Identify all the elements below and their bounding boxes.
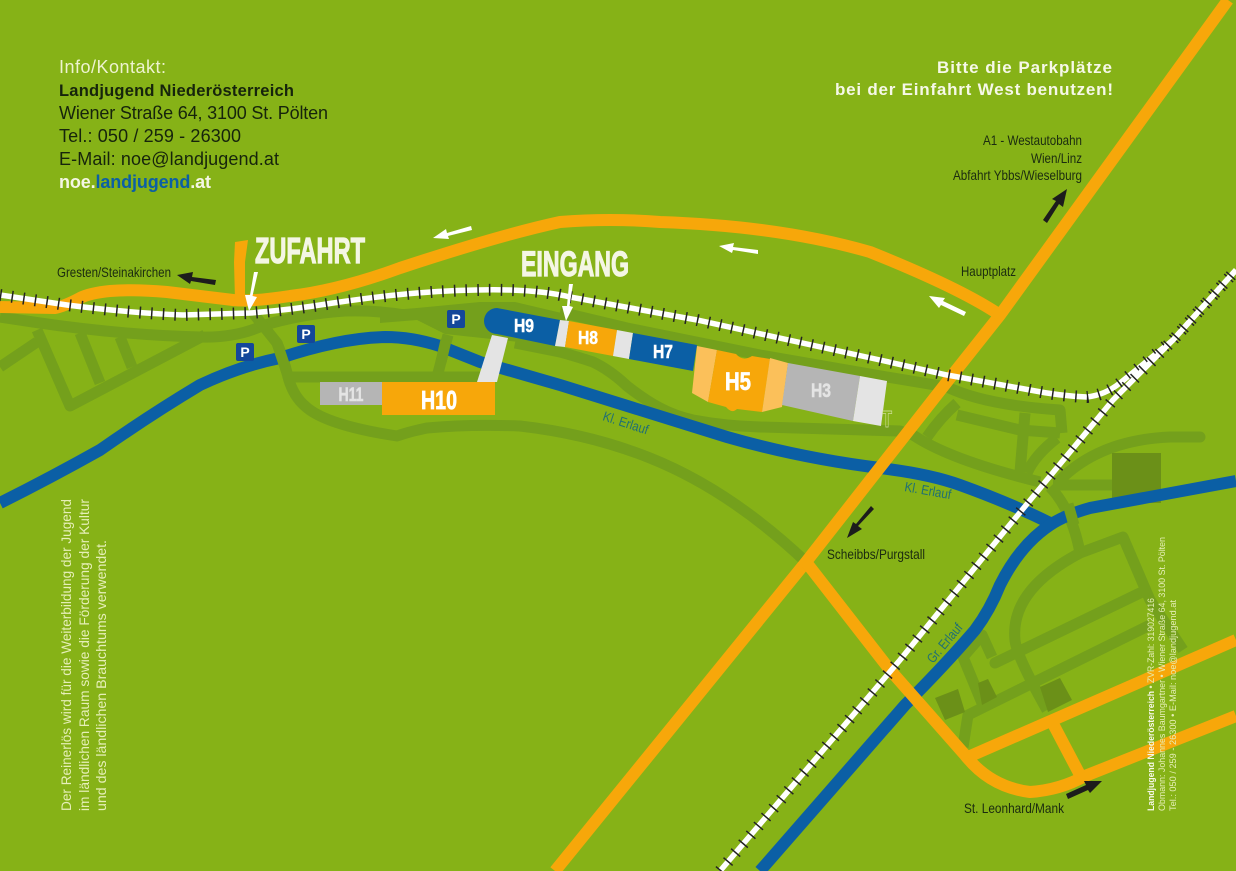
river: Kleine Erlauf [0, 337, 1050, 523]
hall H5: H5 [725, 368, 751, 396]
hall H9 [484, 308, 560, 346]
hall H5 [692, 346, 788, 412]
hall H7 [629, 333, 697, 371]
hall H3 [782, 363, 887, 426]
arrow: black to A1 [1043, 189, 1067, 223]
label: Gresten: Gresten/Steinakirchen [57, 264, 171, 280]
parking notice: bei der Einfahrt West benutzen! [835, 80, 1113, 99]
road crossings over rivers [277, 340, 1074, 525]
river label: Gr. Erlauf: Gr. Erlauf [924, 620, 966, 666]
arrow: to Eingang [562, 284, 573, 321]
arrow: white traffic direction 1 [433, 226, 472, 239]
label: Scheibbs: Scheibbs/Purgstall [827, 546, 925, 562]
road stub to Zufahrt [234, 240, 248, 300]
railway line west-east [0, 270, 1236, 397]
hall H11 [320, 382, 382, 406]
label: St. Leonhard: St. Leonhard/Mank [964, 800, 1065, 816]
vertical note: proceeds: und des ländlichen Brauchtums verwendet. [93, 540, 109, 811]
arrow: to Zufahrt [245, 272, 258, 311]
contact block: noe.landjugend.at [59, 172, 211, 192]
vertical note: proceeds: im ländlichen Raum sowie die Förderung der Kultur [76, 499, 92, 811]
parking sign 3 [447, 310, 465, 328]
arrow: black to Scheibbs [847, 506, 874, 538]
hall H8: H8 [578, 328, 598, 348]
heading: Eingang: EINGANG [521, 245, 629, 284]
arrow: white traffic direction 3 [929, 296, 966, 316]
contact block: Tel.: 050 / 259 - 26300 [59, 126, 241, 146]
contact block: Landjugend Niederösterreich [59, 82, 294, 100]
connector between H9 and H8 [555, 320, 569, 347]
label: A1 Westautobahn: Abfahrt Ybbs/Wieselburg [953, 167, 1082, 183]
arrow: black to Gresten [177, 272, 216, 285]
parking sign 1 [236, 343, 254, 361]
hall H9: H9 [514, 316, 534, 336]
contact block: E-Mail: noe@landjugend.at [59, 149, 279, 169]
small building T marker: T [882, 406, 892, 432]
local roads network [0, 311, 1200, 747]
parking sign 2 [297, 325, 315, 343]
hall H10 [382, 335, 508, 415]
river label: Kl. Erlauf 1: Kl. Erlauf [601, 409, 651, 437]
arrow: white traffic direction 2 [719, 243, 758, 254]
vertical imprint: Tel.: 050 / 259 - 26300 • E-Mail: noe@landjugend.at [1168, 600, 1179, 811]
vertical imprint [1146, 537, 1179, 811]
vertical imprint: Obmann: Johannes Baumgartner • Wiener Straße 64, 3100 St. Pölten [1157, 537, 1168, 811]
hall H7: H7 [653, 342, 673, 362]
hall H3: H3 [811, 381, 831, 402]
river label: Kl. Erlauf 2: Kl. Erlauf [903, 479, 953, 502]
connector between H8 and H7 [613, 330, 633, 359]
hall H10: H10 [421, 385, 457, 415]
heading: Zufahrt: ZUFAHRT [255, 230, 365, 271]
contact block [59, 57, 328, 192]
label: A1 Westautobahn: Wien/Linz [1031, 150, 1082, 166]
river: Große Erlauf [760, 481, 1236, 871]
parking notice: Bitte die Parkplätze [937, 58, 1112, 77]
label: Hauptplatz: Hauptplatz [961, 263, 1016, 279]
parking sign 1: P [240, 344, 250, 360]
railway line south-north [720, 270, 1236, 871]
vertical note: proceeds: Der Reinerlös wird für die Weiterbildung der Jugend [58, 499, 74, 811]
vertical note: proceeds [58, 499, 109, 811]
contact block: Wiener Straße 64, 3100 St. Pölten [59, 103, 328, 123]
parking sign 2: P [301, 326, 311, 342]
dark building blocks [935, 453, 1161, 720]
hall H8 [565, 321, 617, 356]
label: A1 Westautobahn: A1 - Westautobahn [983, 132, 1082, 148]
arrow: black to St. Leonhard [1066, 781, 1102, 799]
forecourt area around hall H9 [380, 302, 570, 347]
vertical imprint: Landjugend Niederösterreich • ZVR-Zahl: 319027416 [1146, 598, 1157, 811]
parking notice [835, 58, 1113, 99]
hall H11: H11 [338, 385, 364, 406]
label: A1 Westautobahn [953, 132, 1082, 183]
contact block: Info/Kontakt: [59, 57, 166, 77]
parking sign 3: P [451, 311, 461, 327]
